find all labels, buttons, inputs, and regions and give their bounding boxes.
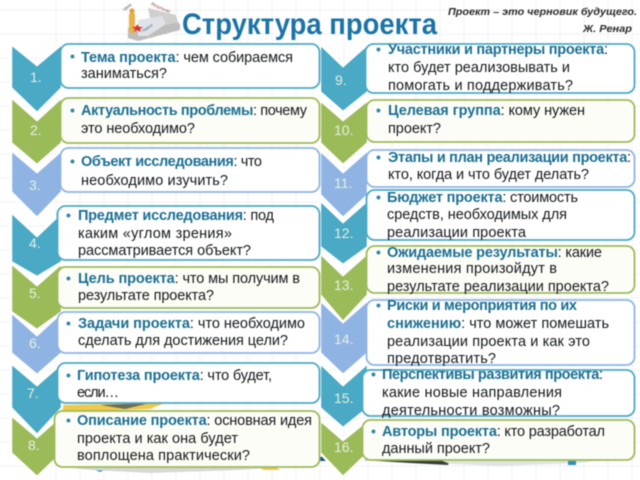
- panel 14: risks: снижению: что может помешать: [387, 316, 609, 332]
- panel 10: target group: проект?: [388, 121, 441, 137]
- panel 9: participants: [366, 41, 634, 94]
- panel 3: object: •: [70, 153, 75, 169]
- panel 5: goal: •: [66, 270, 71, 286]
- chevron 9: [320, 44, 368, 112]
- chevron 7: [11, 363, 62, 435]
- panel 16: authors: Авторы проекта: кто разработал: [382, 424, 605, 440]
- panel 11: stages: Этапы и план реализации проекта:: [388, 150, 631, 166]
- panel 10: target group: [366, 100, 634, 142]
- panel 6: tasks: сделать для достижения цели?: [78, 333, 288, 349]
- chevron 1: 1.: [30, 69, 42, 85]
- panel 10: target group: •: [376, 102, 381, 118]
- panel 6: tasks: •: [66, 315, 71, 331]
- quote: Проект – это черновик будущего.: [448, 6, 637, 18]
- panel 3: object: Объект исследования: что: [81, 154, 262, 170]
- chevron 15: 15.: [334, 390, 353, 406]
- panel 4: subject: рассматривается объект?: [78, 243, 251, 259]
- panel 11: stages: кто, когда и что будет делать?: [388, 167, 589, 183]
- panel 4: subject: Предмет исследования: под: [78, 208, 275, 224]
- panel 4: subject: •: [66, 207, 71, 223]
- chevron 10: 10.: [334, 122, 353, 138]
- chevron 4: 4.: [29, 235, 41, 251]
- panel 2: relevance: Актуальность проблемы: почему: [81, 103, 308, 119]
- panel 1: topic: [60, 44, 320, 88]
- panel 13: expected results: результате реализации проекта?: [387, 279, 609, 295]
- panel 12: budget: реализации проекта: [387, 225, 527, 241]
- chevron 15: [320, 363, 368, 428]
- panel 15: prospects: деятельности возможны?: [382, 403, 560, 419]
- panel 7: hypothesis: [58, 363, 320, 403]
- panel 16: authors: данный проект?: [382, 441, 490, 457]
- panel 6: tasks: [58, 312, 320, 353]
- panel 11: stages: [366, 149, 634, 187]
- chevron 14: [320, 300, 368, 375]
- chevron 13: 13.: [334, 277, 353, 293]
- panel 11: stages: •: [376, 149, 381, 165]
- panel 3: object: [60, 148, 320, 192]
- panel 4: subject: [58, 206, 320, 260]
- chevron 9: 9.: [335, 72, 347, 88]
- panel 15: prospects: какие новые направления: [382, 385, 562, 401]
- chevron 3: 3.: [29, 177, 41, 193]
- panel 1: topic: •: [70, 48, 75, 64]
- panel 13: expected results: Ожидаемые результаты: какие: [387, 245, 602, 261]
- icon: project blocks illustration: Задачи: [141, 23, 153, 33]
- panel 9: participants: кто будет реализовывать и: [388, 60, 570, 76]
- panel 3: object: необходимо изучить?: [81, 173, 228, 189]
- panel 2: relevance: это необходимо?: [81, 121, 195, 137]
- panel 16: authors: [362, 420, 634, 460]
- chevron 11: [320, 150, 368, 218]
- panel 8: description: [54, 411, 320, 467]
- panel 14: risks: предотвратить?: [387, 351, 496, 367]
- panel 2: relevance: •: [70, 102, 75, 118]
- icon: project blocks illustration: [122, 1, 180, 41]
- chevron 4: [11, 212, 62, 277]
- panel 12: budget: [366, 189, 634, 241]
- panel 14: risks: [366, 297, 634, 367]
- panel 7: hypothesis: •: [66, 367, 71, 383]
- panel 10: target group: Целевая группа: кому нужен: [388, 103, 585, 119]
- panel 8: description: •: [66, 412, 71, 428]
- panel 12: budget: средств, необходимых для: [387, 207, 567, 223]
- chevron 5: 5.: [29, 285, 41, 301]
- panel 4: subject: каким «углом зрения»: [78, 226, 232, 242]
- icon: project blocks illustration: Результат: [151, 1, 171, 14]
- chevron 6: 6.: [29, 335, 41, 351]
- chevron 7: 7.: [27, 385, 39, 401]
- chevron 16: [320, 420, 368, 477]
- chevron 8: 8.: [28, 437, 40, 453]
- panel 12: budget: •: [376, 189, 381, 205]
- illustration: books behind the lower panels: [15, 403, 600, 473]
- chevron 3: [11, 150, 62, 218]
- panel 8: description: воплощена практически?: [77, 448, 250, 464]
- right column numbered chevrons: [320, 44, 368, 477]
- panel 12: budget: Бюджет проекта: стоимость: [387, 190, 578, 206]
- panel 15: prospects: •: [371, 366, 376, 382]
- panel 5: goal: Цель проекта: что мы получим в: [78, 271, 300, 287]
- panel 9: participants: помогать и поддерживать?: [388, 78, 573, 94]
- chevron 6: [11, 312, 62, 375]
- chevron 14: 14.: [334, 331, 353, 347]
- panel 9: participants: •: [376, 41, 381, 57]
- chevron 10: [320, 100, 368, 165]
- panel 1: topic: заниматься?: [81, 66, 167, 82]
- left column numbered chevrons: [11, 44, 62, 477]
- panel 16: authors: •: [371, 423, 376, 439]
- quote: Ж. Ренар: [582, 23, 633, 35]
- panel 14: risks: реализации проекта и как это: [387, 334, 590, 350]
- icon: project blocks illustration: Цели: [122, 2, 132, 12]
- panel 1: topic: Тема проекта: чем собираемся: [81, 50, 293, 66]
- panel 7: hypothesis: Гипотеза проекта: что будет,: [77, 368, 272, 384]
- chevron 12: [320, 200, 368, 265]
- panel 13: expected results: изменения произойдут в: [387, 261, 557, 277]
- panel 6: tasks: Задачи проекта: что необходимо: [78, 316, 305, 332]
- panel 8: description: проекта и как она будет: [77, 431, 238, 447]
- title: Структура проекта: [182, 8, 437, 41]
- panel 2: relevance: [60, 98, 320, 143]
- panel 14: risks: •: [376, 297, 381, 313]
- chevron 12: 12.: [334, 225, 353, 241]
- quote: [448, 6, 637, 35]
- panel 15: prospects: Перспективы развития проекта:: [382, 367, 603, 383]
- panel 13: expected results: •: [376, 244, 381, 260]
- panel 14: risks: Риски и мероприятия по их: [387, 298, 577, 314]
- chevron 11: 11.: [334, 175, 352, 191]
- panel 13: expected results: [366, 244, 634, 295]
- panel 15: prospects: [362, 366, 634, 419]
- panel 7: hypothesis: если…: [77, 385, 119, 401]
- chevron 2: [11, 97, 62, 165]
- panel 9: participants: Участники и партнеры проекта:: [388, 42, 608, 58]
- chevron 2: 2.: [30, 122, 42, 138]
- panel 8: description: Описание проекта: основная идея: [77, 413, 312, 429]
- chevron 1: [11, 44, 62, 113]
- panel 5: goal: [58, 267, 320, 308]
- chevron 5: [11, 263, 62, 330]
- chevron 8: [11, 415, 62, 477]
- chevron 16: 16.: [334, 439, 353, 455]
- chevron 13: [320, 253, 368, 322]
- panel 5: goal: результате проекта?: [78, 288, 214, 304]
